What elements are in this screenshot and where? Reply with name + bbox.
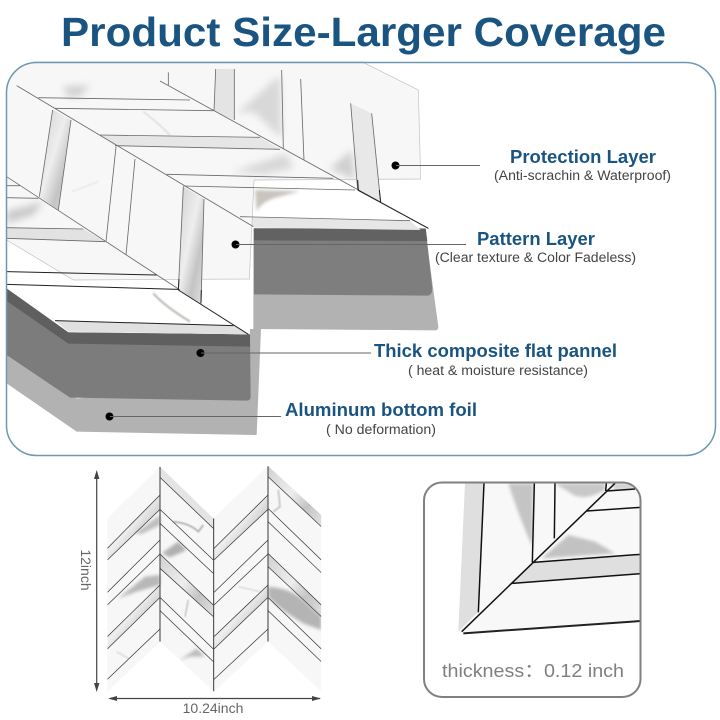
- callout: pattern layer: (Clear texture & Color Fadeless): [435, 250, 636, 265]
- tile joint lines: [7, 69, 428, 303]
- chevron joint lines: [107, 477, 321, 679]
- panel: layer structure: [0, 62, 716, 456]
- height label: 12inch: [78, 549, 94, 591]
- protection layer surface: [0, 62, 421, 303]
- marble veins: [508, 483, 635, 558]
- tile base: [103, 463, 327, 697]
- panel border: [424, 482, 640, 697]
- aluminum bottom foil layer: [7, 228, 438, 435]
- metallic bands: [107, 465, 321, 649]
- dark joint lines on pattern layer: [7, 180, 428, 334]
- callout: protection layer: [392, 147, 671, 183]
- chevron mosaic tile: [103, 463, 327, 697]
- width arrow: [108, 696, 321, 701]
- callout: protection layer: (Anti-scrachin & Waterproof): [494, 168, 671, 183]
- black joint lines: [462, 483, 641, 632]
- title: Product Size-Larger Coverage: [61, 9, 666, 55]
- width label: 10.24inch: [183, 700, 243, 716]
- callout: aluminum foil: ( No deformation): [326, 422, 436, 437]
- callout: pattern layer: [232, 229, 636, 265]
- thickness label: thickness：0.12 inch: [442, 660, 624, 681]
- column seams: [160, 466, 268, 692]
- pattern layer surface: [7, 180, 428, 334]
- tile size diagram: [78, 463, 327, 716]
- composite panel layer: [7, 228, 432, 401]
- callout: aluminum foil: [106, 400, 477, 437]
- callout: protection layer: Protection Layer: [510, 147, 656, 167]
- tile surface: [458, 483, 641, 633]
- callout: composite panel: ( heat & moisture resistance): [408, 363, 588, 378]
- frame outline: [6, 62, 716, 456]
- thickness detail panel: [424, 482, 641, 697]
- close-up corner of tile: [458, 483, 641, 633]
- marble veins: [117, 490, 321, 660]
- layered tile diagram: [0, 62, 438, 435]
- height arrow: [94, 470, 99, 692]
- callout: aluminum foil: Aluminum bottom foil: [285, 400, 477, 420]
- callout: composite panel: [196, 341, 617, 378]
- callout: composite panel: Thick composite flat pannel: [374, 341, 617, 361]
- callout: pattern layer: Pattern Layer: [477, 229, 595, 249]
- metal bands: [458, 483, 641, 632]
